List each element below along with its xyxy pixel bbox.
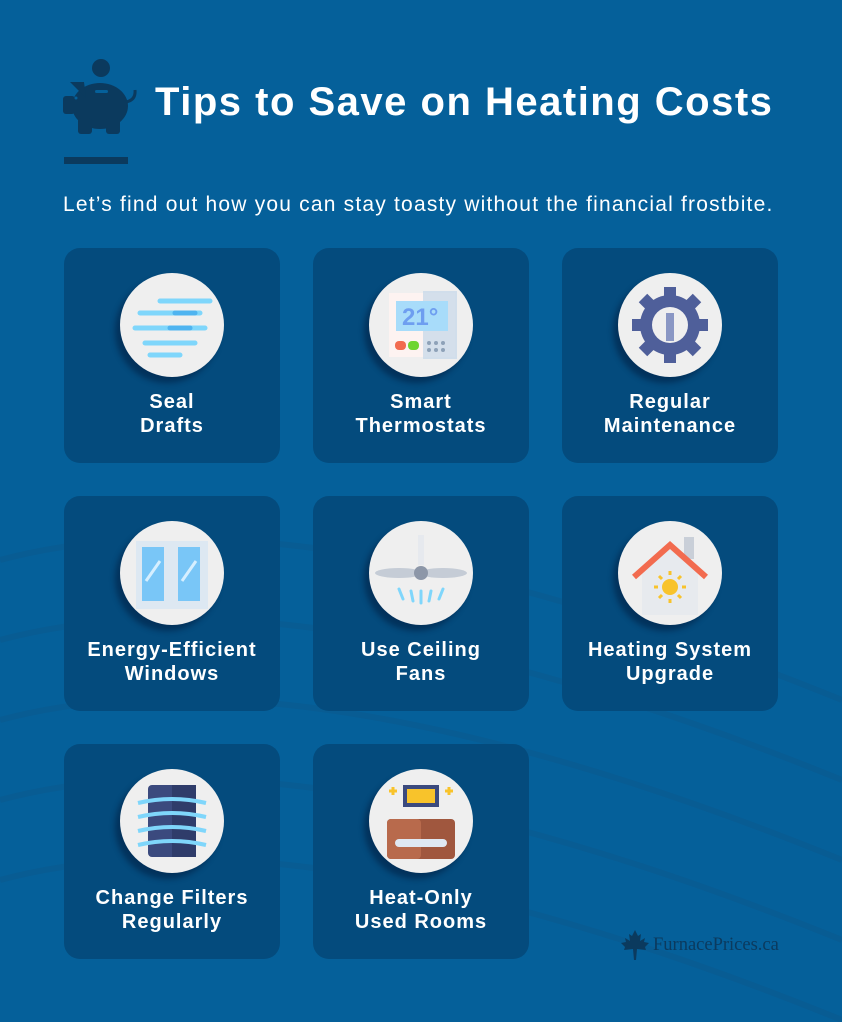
card: Energy-Efficient Windows: Windows — [125, 663, 219, 685]
card: Seal Drafts — [64, 248, 280, 463]
card: Heat-Only Used Rooms: Used Rooms — [355, 911, 487, 933]
card: Heat-Only Used Rooms — [313, 744, 529, 959]
card: Smart Thermostats: Thermostats — [355, 415, 487, 437]
card: Heating System Upgrade: Heating System — [588, 639, 752, 661]
card: Change Filters Regularly: Change Filters — [96, 887, 248, 909]
icon: piggy bank — [63, 59, 137, 134]
card: Energy-Efficient Windows: Energy-Efficient — [87, 639, 257, 661]
card: Regular Maintenance: Regular — [629, 391, 711, 413]
card: Heating System Upgrade: Upgrade — [626, 663, 714, 685]
card: Seal Drafts: Seal — [149, 391, 195, 413]
logo: FurnacePrices.ca — [621, 930, 779, 960]
card: Smart Thermostats — [313, 248, 529, 463]
logo: FurnacePrices.ca: FurnacePrices.ca — [653, 934, 779, 954]
card: Change Filters Regularly — [64, 744, 280, 959]
card: Change Filters Regularly: Regularly — [122, 911, 222, 933]
card: Use Ceiling Fans: Fans — [396, 663, 446, 685]
card: Smart Thermostats: Smart — [390, 391, 452, 413]
card: Regular Maintenance — [562, 248, 778, 463]
card: Heating System Upgrade — [562, 496, 778, 711]
card: Use Ceiling Fans — [313, 496, 529, 711]
underline bar — [64, 157, 128, 164]
card: Energy-Efficient Windows — [64, 496, 280, 711]
card: Smart Thermostats: 21° — [402, 304, 438, 331]
card: Regular Maintenance: Maintenance — [604, 415, 736, 437]
title: Tips to Save on Heating Costs — [155, 80, 773, 124]
card: Use Ceiling Fans: Use Ceiling — [361, 639, 481, 661]
card: Heat-Only Used Rooms: Heat-Only — [369, 887, 473, 909]
card: Seal Drafts: Drafts — [140, 415, 204, 437]
subtitle: Let’s find out how you can stay toasty without the financial frostbite. — [63, 193, 774, 216]
